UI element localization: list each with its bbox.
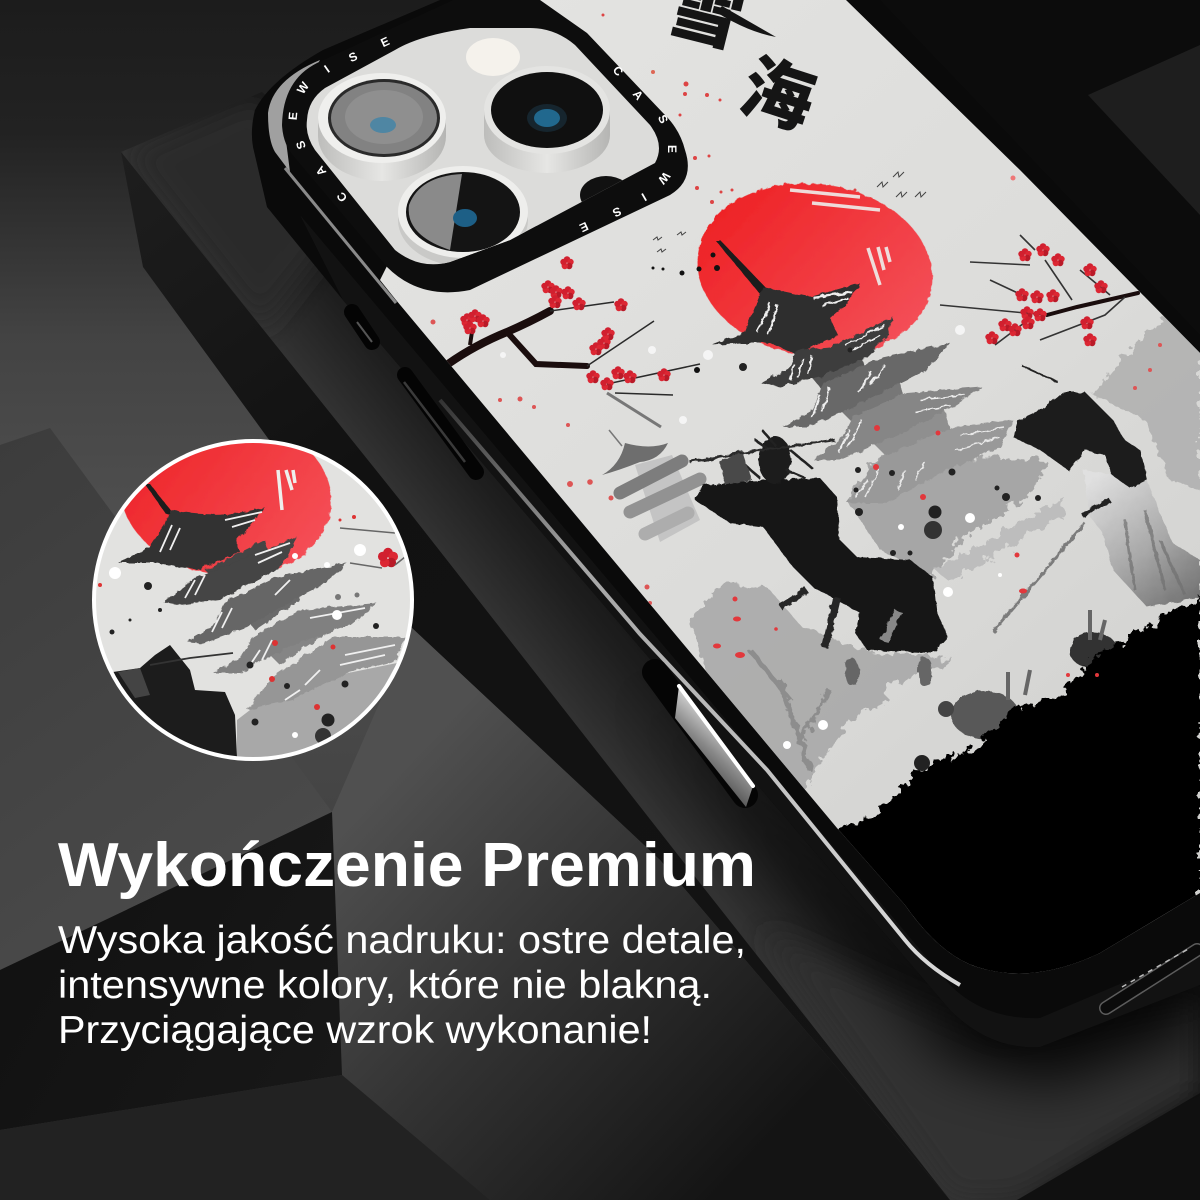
inset artwork (96, 443, 410, 757)
CASEWISE ring text right (577, 63, 679, 235)
body line 1: Wysoka jakość nadruku: ostre detale, (58, 919, 746, 962)
lens: bottom (398, 166, 528, 266)
heading: Wykończenie Premium (58, 831, 756, 900)
CASEWISE ring text right: S (610, 204, 624, 220)
CASEWISE ring text right: C (610, 63, 626, 79)
block: top surface highlight (186, 94, 310, 270)
inset mist (237, 663, 397, 757)
red sun (697, 182, 934, 354)
body line 2: intensywne kolory, które nie blakną. (58, 964, 712, 1007)
case side band (300, 215, 1200, 1047)
grey ink blots (951, 610, 1117, 739)
art frame grey strip (268, 60, 320, 172)
character two: 海 (731, 47, 824, 145)
inset specks (98, 515, 379, 744)
left blossom branch (448, 256, 700, 427)
CASEWISE ring text left: E (286, 111, 300, 121)
inset sun streak (278, 470, 295, 510)
CASEWISE ring text left: I (322, 62, 332, 76)
background: right top block (1088, 45, 1200, 215)
background: right top dark (860, 0, 1200, 345)
side button: action (352, 312, 372, 342)
inset border (94, 441, 412, 759)
paper background (380, 0, 1200, 1000)
sun brush streaks (790, 190, 890, 285)
inset roof hatching (160, 512, 395, 700)
camera glass (307, 28, 659, 264)
birds (653, 172, 926, 252)
side button: volume (404, 375, 476, 472)
calligraphy sweep stroke (716, 6, 776, 37)
CASEWISE ring text left: W (294, 79, 312, 97)
island outer ring (282, 0, 688, 292)
CASEWISE ring text left: S (293, 139, 309, 151)
CASEWISE ring text left: E (378, 34, 392, 50)
lens: top right (484, 66, 610, 173)
ink hill (837, 596, 1200, 1000)
pagoda (712, 241, 1013, 503)
inset blossom (378, 548, 398, 567)
body line 3: Przyciągające wzrok wykonanie! (58, 1009, 652, 1052)
camera island (282, 0, 688, 292)
body text (58, 919, 746, 1052)
block: lower right corner (1017, 1093, 1200, 1200)
CASEWISE ring text right: S (655, 112, 671, 126)
printed artwork (380, 0, 1200, 1000)
block: lower left face (0, 812, 342, 1130)
CASEWISE ring text right: W (655, 169, 673, 187)
small distant pagoda (602, 430, 700, 542)
samurai right (993, 366, 1200, 632)
side button: silver power (655, 672, 753, 807)
samurai left (690, 430, 948, 687)
CASEWISE ring text left: C (334, 189, 350, 205)
magnified detail circle (92, 439, 414, 761)
block: surface under phone (815, 966, 1200, 1196)
camera contents (318, 38, 632, 266)
block: lower left top (0, 428, 332, 970)
calligraphy (658, 0, 824, 145)
CASEWISE ring text left: S (346, 49, 360, 65)
CASEWISE ring text right: I (639, 190, 649, 204)
case gloss line (440, 400, 960, 985)
CASEWISE ring text right: E (577, 219, 591, 235)
CASEWISE ring text left (286, 34, 392, 205)
flash (466, 38, 520, 76)
block: lighter face centre (332, 628, 950, 1200)
case outer frame (252, 0, 1200, 1047)
art frame thin strip (285, 168, 396, 303)
lens: left (318, 73, 446, 181)
block: dark wedge face (121, 152, 950, 1200)
inset pagoda (118, 484, 405, 710)
ink mist (690, 312, 1200, 800)
block: foot area (0, 1075, 490, 1200)
lidar sensor (580, 176, 622, 202)
CASEWISE ring text left: A (313, 163, 329, 179)
inset twigs (340, 528, 405, 568)
phone case body (252, 0, 1200, 1047)
ink specks (430, 14, 1162, 771)
inset samurai (113, 645, 237, 762)
inset sun (124, 443, 332, 574)
phone shadow (640, 690, 1200, 1085)
CASEWISE ring text right: E (665, 145, 679, 153)
right blossom branch (940, 235, 1138, 346)
CASEWISE ring text right: A (630, 87, 646, 103)
charging port (1106, 948, 1197, 1008)
